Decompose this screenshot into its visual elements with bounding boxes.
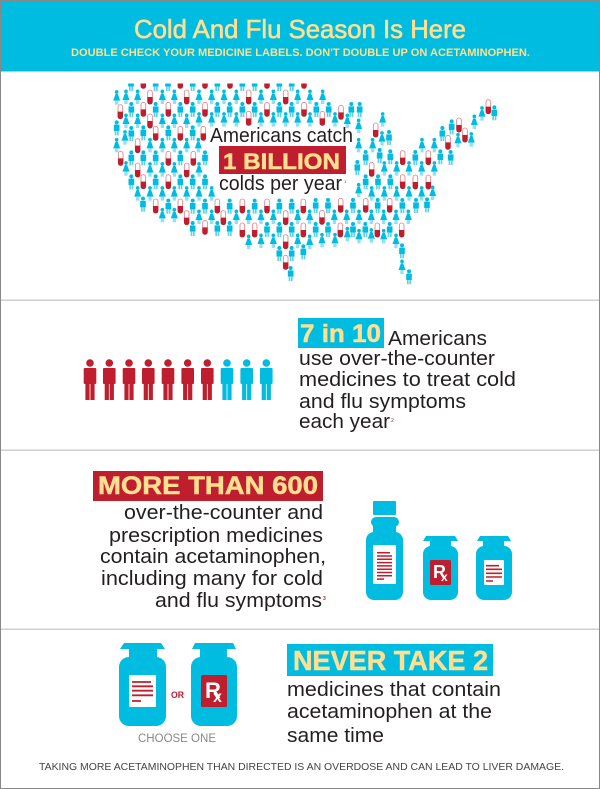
panel: map of people and pills — [113, 74, 497, 284]
icon: over-the-counter bottle — [476, 536, 512, 600]
text: never take 2: NEVER TAKE 2 — [293, 645, 488, 676]
footer warning: TAKING MORE ACETAMINOPHEN THAN DIRECTED IS AN OVERDOSE AND CAN LEAD TO LIVER DAMAGE. — [39, 761, 564, 773]
text: colds per year: colds per year — [219, 173, 342, 195]
icon: Rx bottle, choose one: x — [213, 689, 222, 706]
text: 1 billion: 1 BILLION — [223, 149, 340, 174]
title: Cold And Flu Season Is Here — [134, 14, 466, 44]
text: Americans catch: Americans catch — [210, 125, 353, 147]
row of ten people: 7 in 10 — [84, 359, 273, 400]
header banner — [0, 0, 600, 72]
highlight box: 1 billion — [219, 146, 346, 174]
text block: more than 600: contain acetaminophen, — [100, 546, 326, 568]
highlight box: never take 2 — [287, 644, 493, 676]
text block: 7 in 10 Americans: 2 — [391, 418, 394, 424]
divider 3 — [0, 628, 600, 630]
callout: 1 billion colds — [210, 125, 353, 195]
icon: prescription bottle — [423, 536, 458, 600]
highlight box: 7 in 10 — [298, 318, 384, 348]
highlight box: more than 600 — [93, 471, 323, 501]
text block: more than 600: and flu symptoms — [155, 590, 322, 612]
text: more than 600: MORE THAN 600 — [98, 472, 318, 500]
text block: more than 600: including many for cold — [101, 568, 323, 590]
icon: tall liquid medicine bottle — [366, 501, 403, 600]
text block: 7 in 10 Americans: and flu symptoms — [299, 391, 466, 413]
icon: Rx bottle, choose one: R — [205, 678, 221, 703]
text block: never take 2 — [287, 644, 501, 747]
map western half — [113, 74, 301, 281]
text block: 7 in 10 Americans: medicines to treat cold — [299, 369, 516, 391]
text block: 7 in 10 Americans: each year — [299, 411, 390, 433]
label: or: OR — [171, 690, 184, 700]
text block: never take 2: medicines that contain — [287, 679, 501, 701]
divider 2 — [0, 450, 600, 451]
text block: 7 in 10 Americans: Americans — [388, 328, 487, 350]
icon: prescription bottle: x — [441, 570, 448, 584]
subtitle: DOUBLE CHECK YOUR MEDICINE LABELS. DON'T DOUBLE UP ON ACETAMINOPHEN. — [71, 47, 530, 59]
icon: prescription bottle: R — [433, 562, 446, 582]
label: choose one: CHOOSE ONE — [138, 733, 216, 745]
text block: never take 2: acetaminophen at the — [287, 701, 492, 723]
text block: more than 600 — [93, 471, 326, 612]
divider 1 — [0, 300, 600, 301]
text block: 7 in 10 Americans — [298, 318, 516, 433]
text block: more than 600: 3 — [323, 596, 326, 602]
text block: more than 600: over-the-counter and — [124, 502, 323, 524]
text block: more than 600: prescription medicines — [109, 525, 323, 547]
icon: OTC bottle, choose one — [119, 643, 166, 726]
footnote 1: 1 — [344, 179, 347, 184]
text: 7 in 10: 7 in 10 — [300, 320, 381, 348]
text block: never take 2: same time — [287, 725, 384, 747]
text block: 7 in 10 Americans: use over-the-counter — [299, 348, 495, 370]
icon: Rx bottle, choose one — [191, 643, 237, 726]
map eastern half — [300, 74, 497, 284]
